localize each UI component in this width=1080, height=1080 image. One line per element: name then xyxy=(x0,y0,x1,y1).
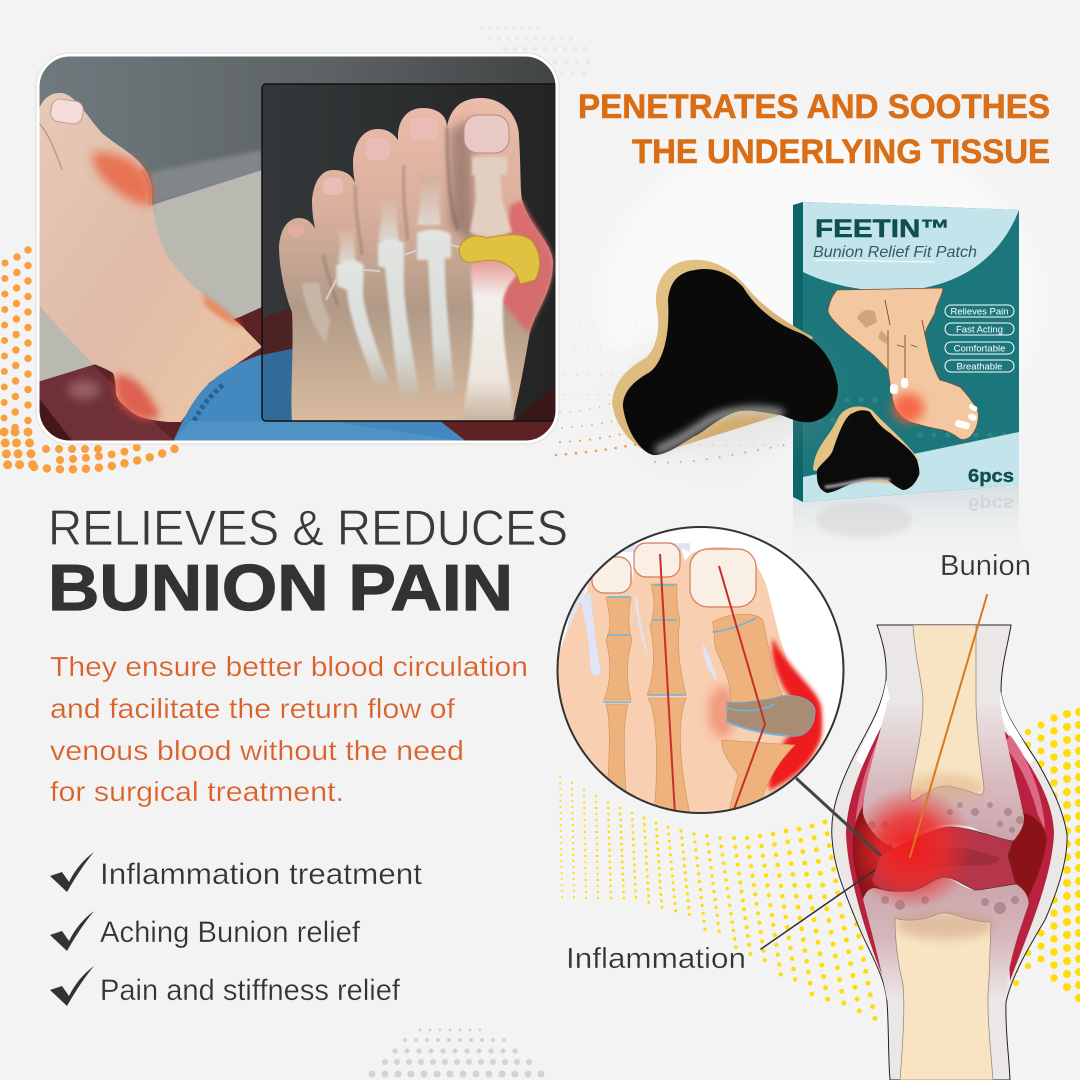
label: bunion: Bunion xyxy=(940,550,1031,582)
product box reflection xyxy=(793,486,1019,555)
check item: inflammation treatment: Inflammation treatment xyxy=(100,858,423,891)
box feature pills: Relieves Pain xyxy=(950,306,1009,318)
left photo foot xyxy=(38,93,262,422)
box brand text: FEETIN™ xyxy=(815,215,950,243)
box feature pills: Fast Acting xyxy=(956,324,1003,336)
paragraph: benefits description: venous blood without the need xyxy=(50,735,464,766)
x-ray foot xyxy=(279,98,553,421)
product box reflection: 6pcs xyxy=(968,494,1014,514)
box pack count: 6pcs xyxy=(968,466,1014,486)
heading: relieves and reduces bunion pain: BUNION PAIN xyxy=(48,551,513,624)
upper bone shaft xyxy=(910,625,984,801)
joint space xyxy=(872,827,1016,891)
upper bone head xyxy=(863,700,1024,845)
nails xyxy=(464,115,509,153)
box feature pills: Breathable xyxy=(957,362,1002,372)
label: inflammation: Inflammation xyxy=(566,943,746,975)
box foot xyxy=(828,288,978,440)
ligament lines xyxy=(326,245,460,300)
box feature pills xyxy=(945,305,1014,372)
check item: pain and stiffness relief: Pain and stiffness relief xyxy=(100,974,401,1007)
x-ray inset xyxy=(262,84,557,421)
synovial capsule right xyxy=(1001,727,1054,981)
checklist xyxy=(50,852,423,1007)
yellow bunion growth xyxy=(459,235,540,284)
heading: relieves and reduces bunion pain xyxy=(48,500,568,624)
jeans xyxy=(173,348,467,442)
porous bone spots xyxy=(868,802,1024,914)
synovial capsule left xyxy=(846,726,882,976)
heading: penetrates and soothes: PENETRATES AND SOOTHES xyxy=(578,88,1050,126)
joint lines xyxy=(603,585,790,736)
lower bone head xyxy=(863,877,1028,1000)
white strips xyxy=(856,680,890,765)
box brand text xyxy=(813,215,977,262)
paragraph: benefits description: They ensure better blood circulation xyxy=(50,651,528,682)
cavity left xyxy=(852,806,894,898)
paragraph: benefits description: and facilitate the return flow of xyxy=(50,693,455,724)
cavity right xyxy=(1008,813,1047,898)
box brand text: Bunion Relief Fit Patch xyxy=(813,244,977,261)
callout lines xyxy=(761,595,987,949)
skin xyxy=(557,542,822,815)
product patch xyxy=(612,260,838,455)
inflamed glow xyxy=(850,786,974,910)
box small patch xyxy=(813,406,919,493)
bunion growth xyxy=(727,695,815,736)
alignment lines xyxy=(660,554,765,815)
box feature pills: Comfortable xyxy=(954,344,1005,354)
paragraph: benefits description: for surgical treatment. xyxy=(50,776,344,807)
check item: inflammation treatment xyxy=(50,852,423,892)
check item: aching bunion relief xyxy=(50,911,361,951)
bones xyxy=(302,157,520,420)
toe bones xyxy=(604,584,795,815)
heading: penetrates and soothes: THE UNDERLYING TISSUE xyxy=(632,133,1050,171)
product box xyxy=(793,200,1019,505)
lower bone shaft xyxy=(895,913,993,1080)
bench xyxy=(38,300,557,442)
toe gaps xyxy=(565,543,718,681)
check item: aching bunion relief: Aching Bunion relief xyxy=(100,916,361,949)
nails xyxy=(592,543,756,607)
magnified bunion illustration xyxy=(557,527,844,815)
joint diagram xyxy=(832,625,1067,1080)
check item: pain and stiffness relief xyxy=(50,966,401,1007)
heading: penetrates and soothes xyxy=(578,88,1050,171)
paragraph: benefits description xyxy=(50,651,528,807)
bunion redness xyxy=(769,638,822,790)
heading: relieves and reduces bunion pain: RELIEVES & REDUCES xyxy=(48,500,568,556)
panel: bunion foot photo with x-ray inset xyxy=(36,53,562,444)
